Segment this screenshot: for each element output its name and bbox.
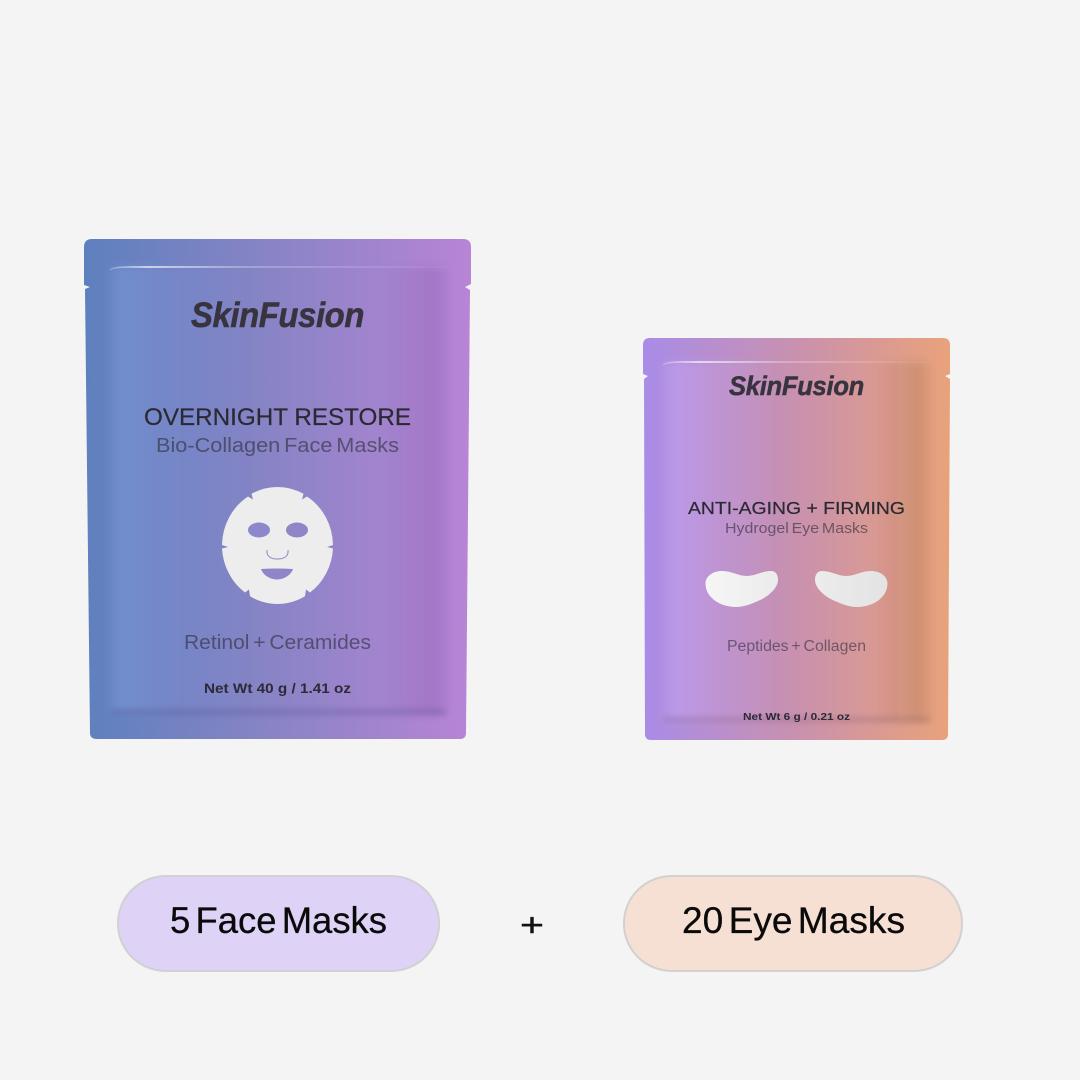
net weight: Net Wt 40 g / 1.41 oz [204,681,351,696]
pill: face mask count [118,876,439,971]
pouch top shine [663,362,930,365]
pill label: 5 Face Masks [170,900,387,941]
pouch top shine [110,267,447,270]
net weight: Net Wt 6 g / 0.21 oz [743,712,850,723]
pouch bottom seal shadow [112,709,446,715]
pouch body [643,338,950,740]
brand logo: SkinFusion [191,296,364,335]
panel: eye mask pouch [643,338,950,740]
product subtitle: Hydrogel Eye Masks [725,520,868,537]
right eye hole [286,522,308,538]
pouch bottom seal shadow [664,717,930,722]
ingredients: Peptides + Collagen [727,638,866,655]
icon: right eye pad [815,571,888,607]
product subtitle: Bio-Collagen Face Masks [156,434,399,457]
pill shape [624,876,962,971]
nose slit [267,550,288,559]
ingredients: Retinol + Ceramides [184,631,371,654]
icon: face sheet mask [222,487,333,604]
product title: ANTI-AGING + FIRMING [688,498,905,518]
pill shape [118,876,439,971]
pill: eye mask count [624,876,962,971]
pouch body [84,239,471,739]
brand logo: SkinFusion [729,371,864,401]
panel: face mask pouch [84,239,471,739]
left eye hole [248,522,270,538]
mouth hole [261,568,293,580]
pouch inner panel shading [662,362,930,722]
plus sign: + [520,907,544,943]
pill label: 20 Eye Masks [682,900,905,941]
pouch inner panel shading [108,267,447,715]
product title: OVERNIGHT RESTORE [144,404,411,431]
icon: left eye pad [706,571,778,607]
